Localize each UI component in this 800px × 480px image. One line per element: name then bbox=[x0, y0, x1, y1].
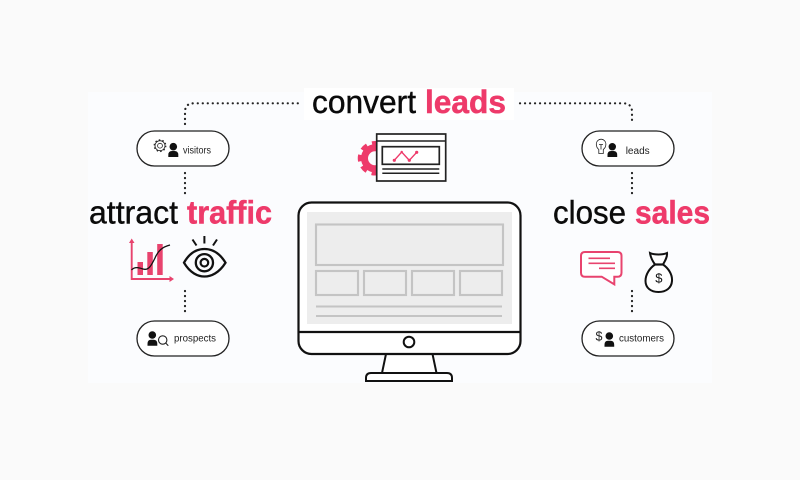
icon: person bbox=[608, 143, 617, 157]
icon: money bag bbox=[646, 253, 672, 292]
label: leads: leads bbox=[626, 146, 650, 157]
icon: money bag: $ bbox=[655, 270, 663, 286]
icon: gear bbox=[154, 140, 166, 152]
label: visitors: visitors bbox=[183, 146, 211, 156]
heading: convert leads bbox=[304, 84, 514, 120]
heading: close sales: sales bbox=[635, 194, 710, 230]
icon: person bbox=[168, 143, 178, 157]
icon: dollar: $ bbox=[596, 330, 602, 344]
icon: magnifier bbox=[158, 336, 168, 346]
pill: leads bbox=[582, 131, 674, 166]
icon: landing page with gear bbox=[360, 134, 446, 181]
connector: top left dotted line bbox=[185, 103, 300, 124]
label: prospects: prospects bbox=[174, 334, 216, 344]
heading: attract traffic: traffic bbox=[187, 194, 272, 230]
heading: close sales bbox=[553, 194, 710, 230]
heading: convert leads: leads bbox=[425, 84, 506, 120]
monitor bbox=[298, 202, 520, 381]
pill: visitors bbox=[137, 131, 229, 166]
heading: convert leads: convert bbox=[312, 84, 416, 120]
monitor base bbox=[366, 373, 452, 381]
heading: attract traffic: attract bbox=[89, 194, 178, 230]
pill: prospects bbox=[137, 321, 229, 356]
icon: speech bubble bbox=[581, 252, 622, 284]
icon: light bulb bbox=[596, 139, 606, 154]
gear bbox=[360, 143, 390, 173]
icon: eye bbox=[184, 236, 226, 276]
screen bbox=[307, 212, 512, 324]
pill: customers bbox=[582, 321, 674, 356]
heading: close sales: close bbox=[553, 194, 626, 230]
connector: top right dotted line bbox=[520, 103, 632, 124]
icon: bar chart with trend line bbox=[129, 238, 174, 282]
icon: person bbox=[604, 332, 614, 347]
mini line chart bbox=[393, 151, 418, 162]
heading: attract traffic bbox=[89, 194, 272, 230]
monitor stand bbox=[382, 354, 436, 373]
connector: leads to close sales bbox=[631, 173, 633, 196]
connector: attract traffic to prospects bbox=[184, 291, 186, 314]
icon: person bbox=[148, 331, 157, 346]
label: customers: customers bbox=[619, 334, 664, 344]
connector: close sales to customers bbox=[631, 291, 633, 314]
connector: visitors to attract traffic bbox=[184, 173, 186, 196]
monitor body bbox=[298, 202, 520, 354]
